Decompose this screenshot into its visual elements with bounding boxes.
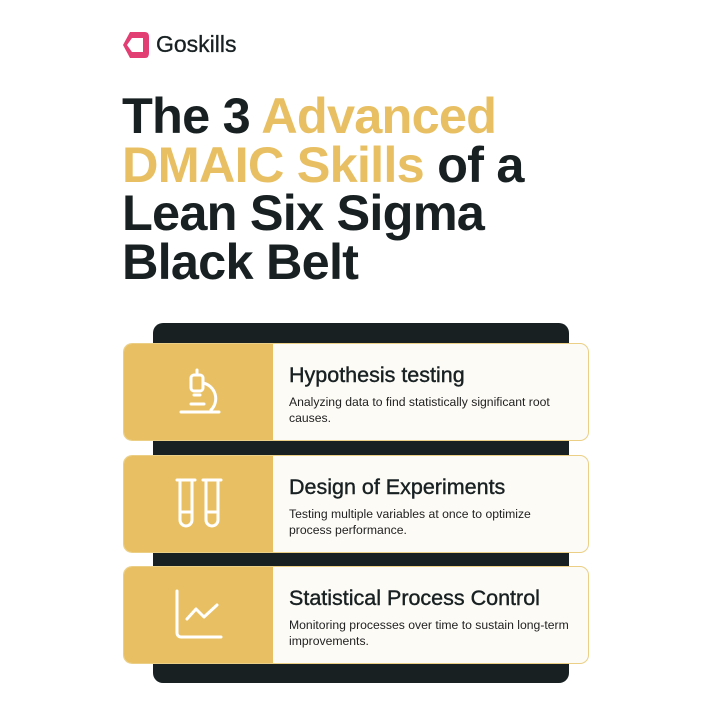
card: design of experiments: Testing multiple variables at once to optimize process performance. [289,507,531,537]
title: Lean Six Sigma [122,184,484,241]
title: Black Belt [122,232,358,290]
card: design of experiments [123,455,589,553]
logo: Goskills [156,31,237,57]
icon: microscope [124,344,273,440]
title: DMAIC Skills of a [122,136,524,192]
icon: line chart [124,567,273,663]
card: hypothesis testing: Analyzing data to find statistically significant root causes. [289,395,550,425]
title: The 3 Advanced [122,87,496,144]
card: statistical process control: Monitoring processes over time to sustain long-term improvements. [289,618,569,648]
dark backing panel [153,323,569,683]
card: statistical process control: Statistical Process Control [289,586,540,610]
card: hypothesis testing: Hypothesis testing [289,363,465,387]
icon: test tubes [124,456,273,552]
title [122,87,525,290]
card: statistical process control [123,566,589,664]
card: hypothesis testing [123,343,589,441]
logo [123,31,237,58]
card: design of experiments: Design of Experiments [289,475,505,499]
